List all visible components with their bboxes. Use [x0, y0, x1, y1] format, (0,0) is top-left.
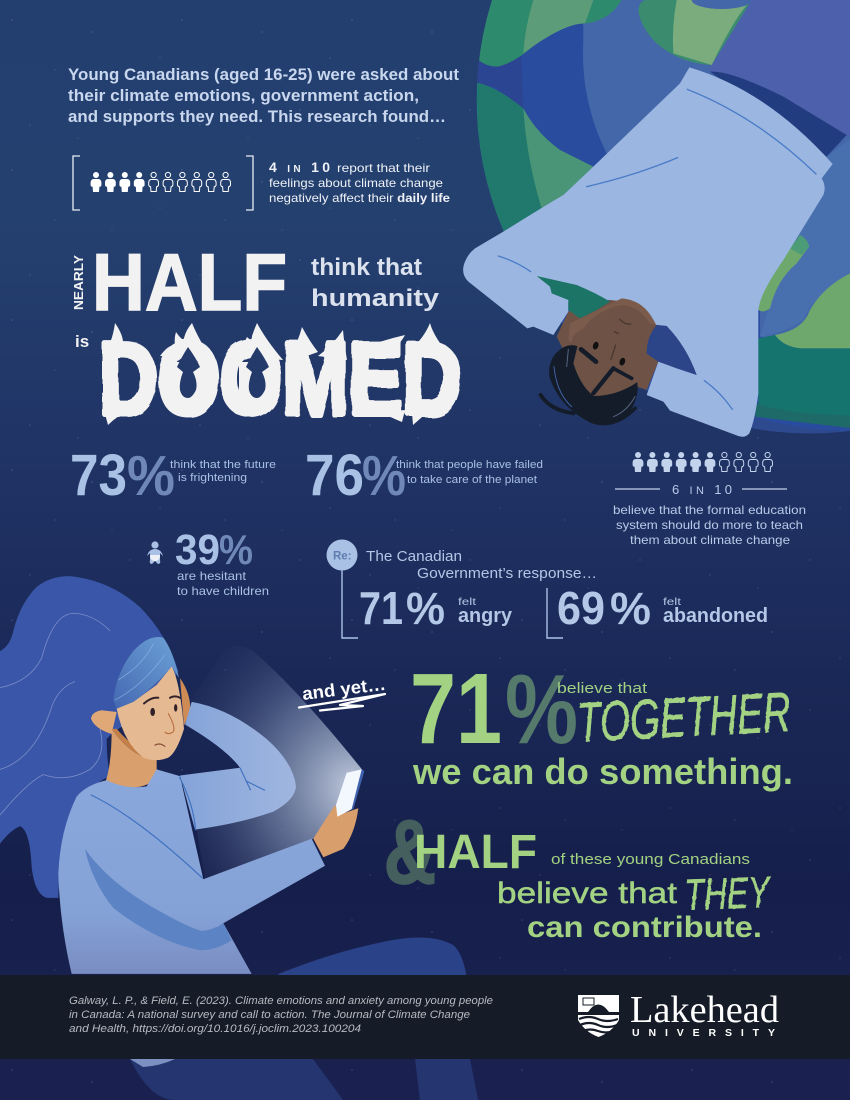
government response section	[326, 540, 768, 638]
half can contribute message: can contribute.	[527, 911, 762, 944]
headline: nearly half think that humanity: HALF	[92, 238, 287, 328]
together message: we can do something.	[412, 751, 793, 792]
stat: 39 percent with baby icon	[147, 526, 269, 598]
stat: 6 in 10	[613, 452, 806, 547]
intro text	[68, 66, 460, 126]
man: sweater	[463, 67, 833, 437]
half can contribute message: of these young Canadians	[551, 851, 750, 868]
woman: hair	[0, 576, 178, 898]
woman: sweater shadow	[85, 849, 232, 950]
man: head and arms skin	[557, 300, 658, 397]
stat: 4 in 10 pictogram	[73, 156, 253, 210]
doomed: teardrop counters in the O letters	[170, 347, 275, 403]
citation: in Canada: A national survey and call to action. The Journal of Climate Change	[69, 1009, 470, 1021]
illustration: woman with phone	[0, 576, 468, 989]
half can contribute message	[384, 803, 772, 944]
woman: phone	[336, 769, 364, 817]
re badge: Re:	[333, 550, 352, 562]
woman: ear	[91, 710, 117, 734]
69 percent abandoned	[557, 582, 768, 634]
71 percent angry	[359, 582, 513, 634]
icon: baby	[147, 541, 163, 564]
together message: %	[505, 654, 578, 764]
citation	[69, 995, 493, 1035]
intro text: their climate emotions, government action,	[68, 87, 419, 105]
stat: 76 percent: to take care of the planet	[407, 474, 537, 486]
government response section: The Canadian	[366, 548, 462, 565]
stat: 76 percent: think that people have failed	[396, 459, 543, 471]
71 percent angry: angry	[458, 605, 513, 627]
stat: 76 percent: 76	[305, 443, 364, 508]
logo: Lakehead University: Lakehead	[630, 989, 779, 1031]
woman: sweater lines	[91, 768, 265, 878]
69 percent abandoned: felt	[663, 597, 681, 608]
woman: phone light beam	[190, 646, 363, 879]
headline: nearly half think that humanity	[71, 238, 440, 351]
woman: leg	[278, 937, 468, 989]
stat text: 4 in 10: negatively affect their daily life	[269, 191, 450, 205]
woman: neck	[106, 729, 157, 788]
stat text: 4 in 10: feelings about climate change	[269, 176, 443, 190]
footer band	[0, 975, 850, 1059]
intro text: and supports they need. This research found…	[68, 108, 446, 126]
woman: hair front band	[113, 637, 179, 709]
stat: 73 percent: think that the future	[170, 459, 276, 471]
lower body below footer	[130, 1059, 478, 1100]
69 percent abandoned: %	[610, 583, 651, 634]
stat text: 4 in 10	[269, 159, 450, 205]
headline: nearly half think that humanity: think that	[311, 254, 422, 281]
government response section: Government’s response…	[417, 565, 597, 582]
stat: 6 in 10: system should do more to teach	[616, 518, 803, 532]
71 percent angry: 71	[359, 582, 403, 634]
together message	[410, 653, 793, 792]
woman: sweater body	[58, 769, 325, 974]
stat: 39 percent with baby icon: %	[219, 526, 253, 573]
stat: 39 percent with baby icon: are hesitant	[177, 569, 247, 583]
man: sweater fold lines	[498, 89, 816, 409]
half can contribute message: HALF	[414, 826, 537, 879]
69 percent abandoned: abandoned	[663, 605, 768, 627]
logo: Lakehead University: UNIVERSITY	[632, 1027, 775, 1039]
stat: 6 in 10: believe that the formal education	[613, 503, 806, 517]
stat: 39 percent with baby icon: 39	[175, 526, 220, 574]
stat: 73 percent: 73	[70, 443, 127, 508]
headline: nearly half think that humanity: is	[75, 332, 89, 351]
together message: 71	[410, 653, 502, 765]
re badge	[326, 540, 358, 570]
man: face	[568, 298, 656, 366]
69 percent abandoned: 69	[557, 582, 605, 634]
logo: Lakehead University	[578, 989, 779, 1039]
illustration: young man lying on globe	[463, 67, 833, 437]
headline: nearly half think that humanity: humanity	[311, 285, 440, 312]
and yet with scribble: and yet…	[301, 674, 387, 704]
citation: and Health, https://doi.org/10.1016/j.joclim.2023.100204	[69, 1023, 361, 1035]
half can contribute message: believe that	[497, 877, 678, 910]
stat: 73 percent: %	[127, 444, 175, 508]
man: hair	[541, 346, 637, 423]
half can contribute message: &	[384, 803, 436, 903]
stat: 73 percent	[70, 443, 276, 508]
stat: 39 percent with baby icon: to have children	[177, 584, 269, 598]
headline: doomed flame lettering: DOOMED	[99, 322, 461, 436]
woman: raised arm	[180, 702, 296, 830]
stat: 76 percent	[305, 443, 543, 508]
woman: hand	[313, 805, 358, 857]
stat: 73 percent: is frightening	[178, 472, 247, 484]
illustration: globe	[476, 0, 850, 434]
71 percent angry: felt	[458, 597, 476, 608]
stat: 6 in 10: 6 IN 10	[672, 482, 732, 497]
6 in 10 pictogram	[633, 452, 772, 472]
intro text: Young Canadians (aged 16-25) were asked about	[68, 66, 460, 84]
together message: believe that	[557, 680, 648, 697]
stat text: 4 in 10: 4 IN 10	[269, 159, 330, 175]
doomed: flame tips and tails	[102, 323, 452, 425]
71 percent angry: %	[406, 583, 445, 634]
logo shield	[578, 995, 619, 1037]
man: green shirt	[537, 276, 610, 318]
man: blue sleeve lining	[647, 325, 697, 375]
half can contribute message: THEY	[684, 868, 772, 920]
headline: nearly half think that humanity: NEARLY	[71, 255, 86, 310]
stat: 76 percent: %	[362, 444, 406, 508]
woman: hair strands	[0, 613, 110, 815]
stat text: 4 in 10: report that their	[337, 161, 430, 175]
citation: Galway, L. P., & Field, E. (2023). Climate emotions and anxiety among young people	[69, 995, 493, 1007]
woman: face	[117, 666, 184, 760]
stat: 6 in 10: them about climate change	[630, 533, 790, 547]
